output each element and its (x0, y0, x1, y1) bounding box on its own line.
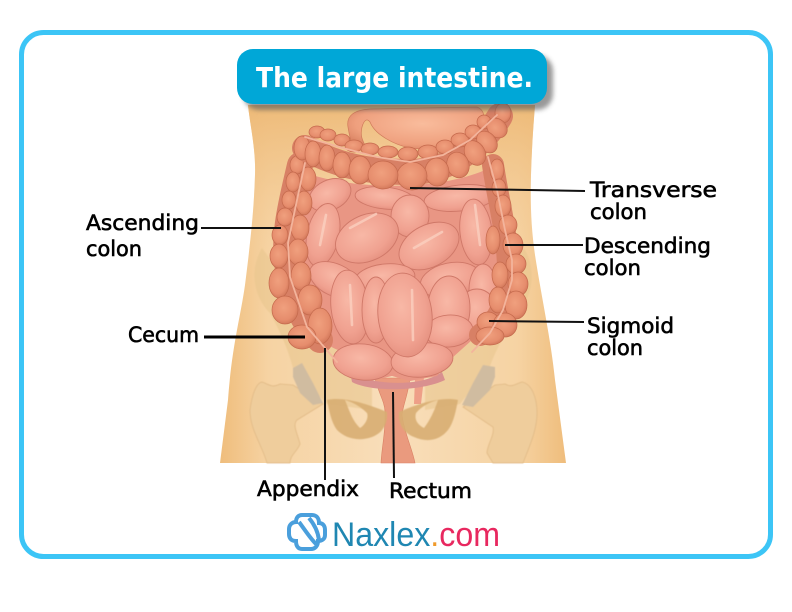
label: sigmoid colon (489, 314, 674, 360)
anatomy illustration (220, 103, 566, 463)
ascending colon (269, 156, 332, 349)
label: ascending colon: Ascending (86, 211, 199, 235)
colon bands (288, 115, 512, 362)
label: rectum: Rectum (389, 479, 472, 503)
label: cecum: Cecum (128, 323, 199, 347)
label: transverse colon: Transverse (589, 178, 717, 202)
icon: logo cross (289, 515, 325, 549)
label: transverse colon (410, 178, 717, 224)
upper loops (423, 181, 497, 215)
transverse colon (294, 103, 511, 190)
lower loops (457, 289, 497, 335)
label: ascending colon (86, 211, 281, 261)
descending and sigmoid colon (476, 159, 528, 345)
label: descending colon (505, 234, 711, 280)
logo (289, 515, 500, 554)
pubic bones (327, 399, 458, 440)
label: descending colon: colon (584, 256, 641, 280)
label: appendix: Appendix (257, 477, 359, 501)
small intestine (300, 170, 501, 389)
torso (220, 105, 566, 463)
label: sigmoid colon: Sigmoid (587, 314, 674, 338)
stomach (348, 107, 484, 149)
pelvis bones (250, 248, 537, 463)
title banner: The large intestine. (256, 61, 533, 94)
logo wordmark: Naxlex.com (332, 516, 500, 554)
label: transverse colon: colon (590, 200, 647, 224)
label: rectum (389, 392, 472, 503)
label: sigmoid colon: colon (587, 336, 643, 360)
title banner (237, 49, 553, 110)
label: descending colon: Descending (584, 234, 711, 258)
rectum (375, 378, 424, 463)
label: ascending colon: colon (86, 237, 142, 261)
intestine highlights (320, 205, 480, 340)
